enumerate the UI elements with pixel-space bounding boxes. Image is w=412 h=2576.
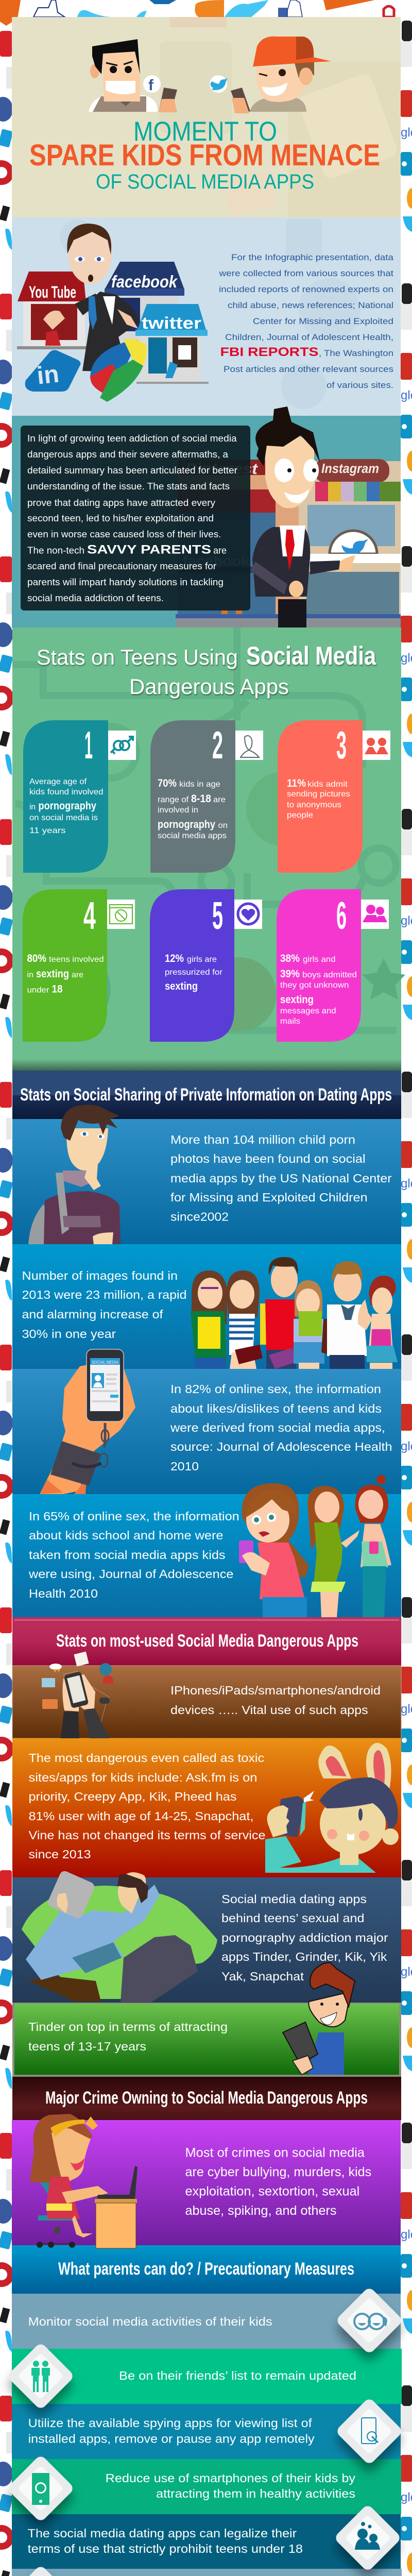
- diamond icons for precaution rows: [6, 2286, 403, 2576]
- panel: number of images: 2013 were 23 million, a rapid: [22, 1288, 186, 1301]
- panel: 82% of online sex: source: Journal of Adolescence Health: [170, 1440, 392, 1453]
- section heading: what parents can do: [12, 2245, 401, 2294]
- panel: tinder: [12, 1962, 401, 2077]
- panel: 82% of online sex: 2010: [170, 1460, 199, 1473]
- panel: most dangerous apps: Vine has not changed its terms of service: [29, 1828, 266, 1842]
- illustration: man in suit: [250, 406, 355, 628]
- intro text: Children, Journal of Adolescent Health,: [225, 332, 393, 342]
- panel: more than 104 million photos: media apps by the US National Center: [170, 1172, 392, 1185]
- illustration: hands using a phone: [42, 1651, 113, 1750]
- text box: summary: parents will impart handy solutions in tackling: [27, 577, 224, 587]
- stat card 4: teens involved: [49, 955, 104, 964]
- illustration: street shops: Pinterest: [185, 461, 259, 478]
- stat card 6: messages and: [280, 1007, 336, 1015]
- text box: summary: second teen, led to his/her exploitation and: [27, 513, 214, 523]
- panel: devices: [12, 1651, 401, 1750]
- stat card 1: Average age of: [29, 777, 87, 786]
- panel: devices: devices ….. Vital use of such apps: [170, 1703, 368, 1717]
- intro text: Post articles and other relevant sources: [224, 364, 393, 374]
- panel: crimes: are cyber bullying, murders, kids: [185, 2165, 371, 2179]
- illustration: boy with cap and phone: [210, 37, 331, 113]
- stat card 4: [23, 889, 135, 1042]
- title text: [29, 116, 380, 193]
- icon: smiley phone: [7, 2454, 75, 2522]
- stat card 3: people: [287, 811, 313, 820]
- panel: more than 104 million photos: [12, 1119, 401, 1244]
- teen 5: [321, 1261, 372, 1369]
- heading: [37, 641, 376, 699]
- text box: summary: even in worse case caused loss of their lives.: [27, 529, 221, 539]
- section heading: major crime: [12, 2077, 401, 2120]
- stat card 3: [278, 720, 390, 873]
- panel: 65% of online sex: were using, Journal of Adolescence: [28, 1567, 233, 1581]
- panel: dating apps: pornography addiction major: [221, 1931, 388, 1944]
- panel: crimes: abuse, spiking, and others: [185, 2204, 337, 2218]
- panel: crimes: exploitation, sextortion, sexual: [185, 2184, 359, 2199]
- icon: linkedin: [25, 350, 80, 392]
- stat card 6: 38%: [280, 953, 300, 964]
- stat card 2: kids in age: [179, 780, 220, 789]
- stat card 2: 8-18: [191, 793, 211, 805]
- section heading: social sharing: [12, 1071, 401, 1119]
- intro text: For the Infographic presentation, data: [231, 252, 394, 262]
- stat card 3: 3: [336, 723, 347, 767]
- row 5: [12, 2514, 401, 2569]
- text box: summary: understanding of the issue. The stats and facts: [27, 481, 230, 492]
- panel: 65% of online sex: taken from social media apps kids: [29, 1548, 226, 1562]
- heading: Social Media: [246, 641, 376, 670]
- illustration: cartoon boy with phone: [283, 1962, 355, 2075]
- panel: most dangerous apps: 81% user with age of 14-25, Snapchat,: [29, 1809, 254, 1823]
- text box: summary: scared and final precautionary measures for: [27, 561, 216, 571]
- girl 2: [307, 1486, 359, 1617]
- stat card 3: 11%: [287, 777, 306, 789]
- panel: 65% of online sex: Health 2010: [29, 1587, 98, 1600]
- illustration: worried girl and teasing friends: [239, 1475, 391, 1617]
- stat card 4: 18: [52, 983, 63, 995]
- teen 6: [367, 1276, 398, 1369]
- stat card 2: on: [218, 821, 228, 830]
- panel: 82% of online sex: In 82% of online sex, the information: [170, 1382, 381, 1396]
- teen 3: [260, 1257, 298, 1369]
- row 3: Utilize the available spying apps for viewing list of: [28, 2416, 312, 2430]
- panel: dating apps: behind teens’ sexual and: [221, 1911, 365, 1925]
- stat card 2: are: [213, 795, 226, 804]
- panel: data sources intro: [12, 217, 401, 416]
- row 4: [12, 2459, 401, 2514]
- intro text: child abuse, news references; National: [228, 300, 393, 310]
- icon: linkedin: in: [36, 361, 60, 390]
- stat card 5: [150, 889, 262, 1042]
- panel: title: [12, 17, 401, 217]
- youtube shop: You Tube: [29, 283, 76, 301]
- row 6: [12, 2569, 402, 2576]
- illustration: street shops: [176, 459, 401, 628]
- intro text: FBI REPORTS: [220, 345, 318, 359]
- row 5: The social media dating apps can legalize their: [28, 2527, 297, 2540]
- panel: most dangerous apps: [12, 1738, 401, 1877]
- row 5: terms of use that strictly prohibit teens under 18: [28, 2542, 303, 2555]
- stat card 1: in: [29, 803, 36, 811]
- icon: parent reading: [7, 2565, 75, 2576]
- text box: summary: prove that dating apps have attracted every: [27, 498, 215, 508]
- illustration: man with phone: f: [148, 77, 154, 94]
- stat card 1: on social media is: [29, 814, 98, 822]
- intro text: , The Washington: [319, 348, 393, 358]
- panel: crimes: Most of crimes on social media: [185, 2146, 365, 2160]
- teen 1: [191, 1270, 228, 1369]
- stat card 5: 5: [212, 894, 223, 937]
- panel: summary with shop scene: [12, 406, 401, 628]
- title text: MOMENT TO: [133, 116, 277, 147]
- panel: number of images: and alarming increase of: [22, 1308, 163, 1321]
- illustration: thinking boy with backpack: [28, 1105, 121, 1244]
- stat card 1: 11 years: [29, 826, 66, 835]
- precaution rows: [11, 2294, 402, 2576]
- panel: crimes: [12, 2120, 401, 2245]
- section heading: most-used apps: [12, 1617, 401, 1666]
- businessman: [43, 224, 140, 372]
- illustration: girl at laptop: [30, 2114, 138, 2248]
- stat card 1: 1: [84, 723, 93, 767]
- stat card 2: 70%: [158, 777, 177, 789]
- stat card 2: involved in: [158, 806, 198, 815]
- youtube shop: [17, 272, 89, 349]
- text box: summary: dangerous apps and their severe aftermaths, a: [27, 449, 229, 460]
- panel: more than 104 million photos: photos have been found on social: [170, 1152, 366, 1165]
- stat card 5: 12%: [165, 953, 184, 964]
- icon: happy kids: [335, 2286, 403, 2354]
- stat card 6: they got unknown: [280, 981, 349, 990]
- panel: 82% of online sex: were derived from social media apps,: [170, 1421, 385, 1434]
- icon: touch phone: [335, 2397, 403, 2465]
- panel: most dangerous apps: since 2013: [29, 1848, 91, 1861]
- text box: summary: SAVVY PARENTS: [87, 543, 211, 556]
- row 4: attracting them in healthy activities: [156, 2487, 355, 2500]
- stat card 6: [277, 889, 389, 1042]
- heading: Stats on Teens Using: [37, 645, 238, 669]
- panel: most dangerous apps: priority, Creepy App, Kik, Pheed has: [29, 1790, 236, 1803]
- icon: couple with hearts: [334, 2504, 402, 2572]
- girl 3: [355, 1475, 391, 1617]
- illustration: hand chained to phone: [40, 1349, 135, 1494]
- panel: number of images: Number of images found in: [22, 1269, 178, 1282]
- intro text: included reports of renowned experts on: [219, 284, 393, 294]
- intro text: of various sites.: [327, 380, 393, 390]
- text box: summary: The non-tech: [27, 545, 84, 555]
- panel: number of images: [12, 1244, 401, 1369]
- panel: 82% of online sex: about likes/dislikes of teens and kids: [170, 1402, 382, 1415]
- text box: summary: are: [213, 545, 227, 555]
- stat card 3: to anonymous: [287, 801, 341, 809]
- text box: summary: detailed summary has been articulated for better: [27, 465, 237, 476]
- intro text: [218, 252, 394, 390]
- stat card 3: kids admit: [307, 780, 348, 789]
- text box: summary: [21, 426, 250, 611]
- intro text: Center for Missing and Exploited: [253, 316, 393, 326]
- stat card 4: in: [27, 971, 33, 979]
- stat card 5: pressurized for: [165, 968, 223, 977]
- facebook shop: [105, 262, 184, 350]
- icon: google places sphere: [90, 339, 147, 402]
- panel: tinder: Tinder on top in terms of attracting: [28, 2020, 228, 2033]
- panel: more than 104 million photos: More than 104 million child porn: [170, 1133, 355, 1146]
- stat card 4: 80%: [27, 953, 46, 964]
- heading: Dangerous Apps: [129, 674, 289, 699]
- text box: summary: social media addiction of teens.: [27, 593, 164, 603]
- stat card 4: sexting: [36, 968, 69, 980]
- illustration: bunny kid taking a selfie: [265, 1743, 399, 1873]
- stat card 1: kids found involved: [29, 788, 103, 796]
- panel: number of images: 30% in one year: [22, 1327, 116, 1341]
- girl 1: [239, 1483, 309, 1617]
- stat card 6: boys admitted: [302, 971, 357, 979]
- panel: dating apps: Yak, Snapchat: [221, 1970, 304, 1983]
- stat card 2: [150, 720, 263, 873]
- row 1: Monitor social media activities of their kids: [28, 2315, 272, 2328]
- panel: dating apps: [12, 1870, 401, 2003]
- twitter shop: [135, 304, 209, 384]
- illustration: street shops: facebook: [183, 553, 250, 569]
- panel: dating apps: apps Tinder, Grinder, Kik, Yik: [221, 1950, 387, 1963]
- row 1: [12, 2294, 401, 2349]
- row 3: [12, 2404, 401, 2459]
- icon: two friends: [7, 2342, 75, 2410]
- panel: dating apps: Social media dating apps: [221, 1892, 367, 1906]
- panel: most dangerous apps: The most dangerous even called as toxic: [29, 1751, 264, 1765]
- facebook shop: facebook: [111, 272, 178, 291]
- title text: OF SOCIAL MEDIA APPS: [96, 171, 314, 193]
- text box: summary: In light of growing teen addiction of social media: [27, 433, 237, 444]
- panel: devices: IPhones/iPads/smartphones/android: [170, 1684, 381, 1697]
- stat card 4: under: [27, 986, 49, 994]
- stat card 1: [23, 720, 136, 873]
- panel: 82% of online sex: [12, 1369, 401, 1494]
- stat card 6: 6: [336, 894, 347, 937]
- stat card 4: 4: [83, 894, 96, 937]
- illustration: group of teens: [191, 1257, 398, 1369]
- illustration: boy on grass with tablet: [22, 1870, 217, 2002]
- stat card 2: social media apps: [158, 832, 227, 840]
- illustration: businessman with social media shops: [17, 224, 209, 402]
- stat card 2: pornography: [158, 819, 215, 831]
- stat card 5: sexting: [165, 980, 198, 992]
- stat card 6: 39%: [280, 968, 300, 980]
- stat card 4: are: [72, 971, 83, 979]
- illustration: street shops: Instagram: [321, 461, 379, 476]
- stat card 2: range of: [158, 795, 189, 804]
- row 4: Reduce use of smartphones of their kids by: [106, 2471, 356, 2485]
- panel: 65% of online sex: [12, 1475, 401, 1617]
- stat card 6: mails: [280, 1017, 300, 1026]
- stat card 6: girls and: [303, 955, 336, 964]
- teen 4: [294, 1280, 324, 1369]
- stat card 1: pornography: [38, 800, 96, 812]
- row 3: installed apps, remove or pause any app remotely: [28, 2432, 315, 2445]
- panel: more than 104 million photos: since2002: [170, 1210, 229, 1223]
- intro text: were collected from various sources that: [218, 268, 393, 278]
- panel: tinder: teens of 13-17 years: [28, 2040, 146, 2053]
- stat card 5: girls are: [187, 955, 217, 964]
- illustration: hand chained to phone: SOCIAL MEDIA: [92, 1360, 119, 1365]
- stat card 6: sexting: [280, 994, 314, 1006]
- illustration: man with phone: [89, 39, 177, 112]
- stat card 2: 2: [212, 723, 223, 767]
- row 2: Be on their friends’ list to remain updated: [119, 2369, 356, 2382]
- panel: more than 104 million photos: for Missing and Exploited Children: [170, 1191, 368, 1204]
- teen 2: [227, 1270, 263, 1369]
- panel: 65% of online sex: about kids school and home were: [29, 1529, 223, 1542]
- panel: 65% of online sex: In 65% of online sex, the information: [29, 1510, 239, 1523]
- row 2: [12, 2349, 402, 2404]
- panel: most dangerous apps: sites/apps for kids include: Ask.fm is on: [29, 1771, 258, 1784]
- stat card 3: sending pictures: [287, 790, 350, 799]
- panel: stats on teens: [12, 628, 405, 1071]
- twitter shop: twitter: [142, 314, 201, 332]
